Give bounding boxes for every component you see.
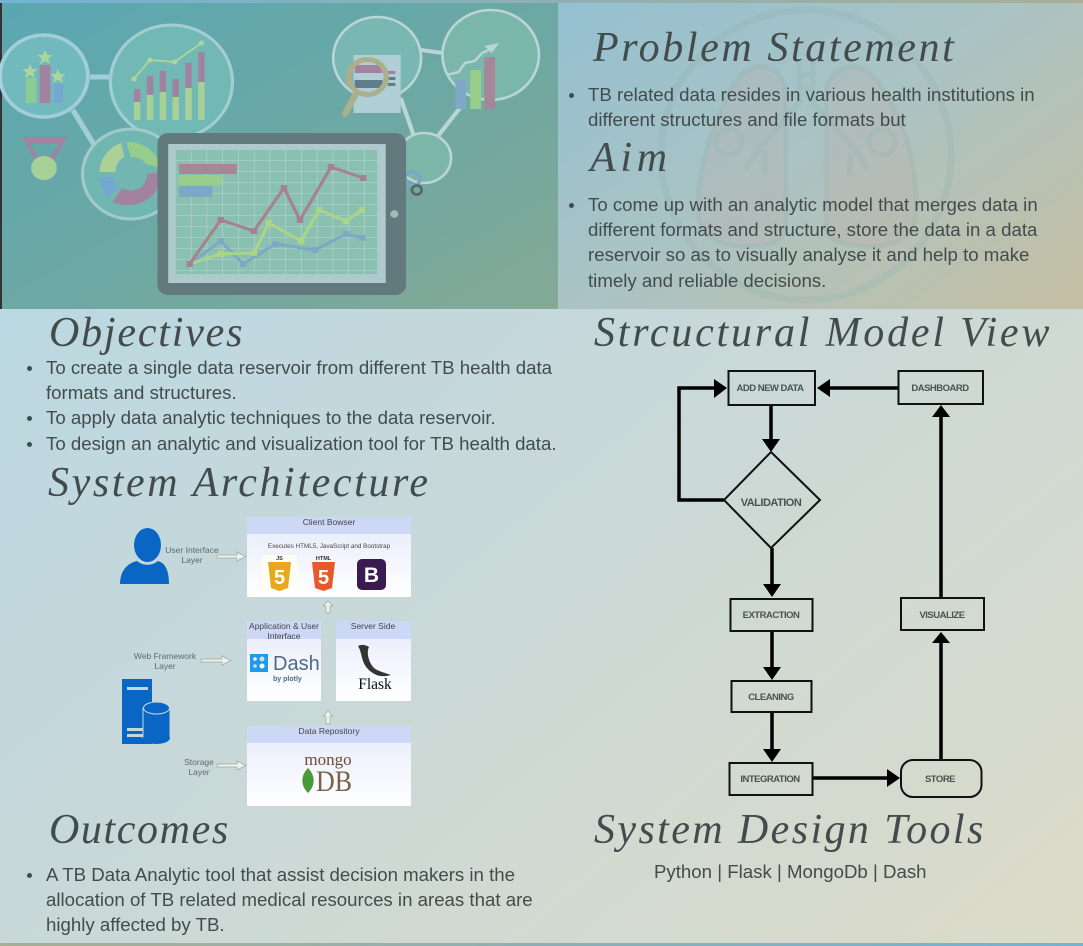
layer: client browser: Client Bowser [303, 517, 355, 527]
text: aim: different formats and structure, store the data in a data [588, 219, 1037, 240]
text: objectives list: To design an analytic and visualization tool for TB health data. [46, 433, 557, 454]
icon: dash logo [250, 653, 320, 683]
circle: magnifier report [333, 17, 421, 114]
text: aim: reservoir so as to visually analyse it and help to make [588, 244, 1029, 265]
icon: html5 [312, 556, 335, 591]
icon: dash logo: by plotly [273, 676, 302, 683]
label: web framework layer: Layer [154, 661, 176, 671]
icon: dash logo: Dash [273, 653, 320, 675]
label: user interface layer: Layer [181, 555, 203, 565]
step: store: STORE [925, 774, 955, 785]
step: validation: VALIDATION [741, 497, 802, 509]
step: dashboard: DASHBOARD [911, 383, 969, 394]
step: validation [724, 452, 820, 548]
tablet with line chart [157, 133, 406, 295]
label: storage layer: Layer [188, 767, 210, 777]
icon: mongodb logo [302, 750, 352, 798]
text: objectives list: To create a single data reservoir from different TB health data [46, 356, 552, 378]
text: aim: To come up with an analytic model that merges data in [588, 194, 1038, 214]
text: objectives list: formats and structures. [46, 382, 237, 403]
icon: bootstrap: B [364, 564, 379, 587]
heading: system architecture: System Architecture [48, 460, 431, 506]
heading: aim: Aim [590, 135, 672, 181]
top colour band [0, 0, 1083, 3]
text: outcomes [27, 864, 533, 935]
step: dashboard [898, 371, 983, 404]
label: user interface layer: User Interface [165, 545, 219, 555]
step: integration: INTEGRATION [740, 774, 800, 785]
heading: system design tools: System Design Tools [594, 807, 986, 853]
heading: outcomes: Outcomes [49, 807, 230, 853]
step: store [901, 760, 982, 797]
text: outcomes: allocation of TB related medical resources in areas that are [46, 889, 533, 910]
icon: bootstrap [357, 559, 386, 590]
layer: application interface: Application & User [249, 621, 319, 631]
text: outcomes: A TB Data Analytic tool that assist decision makers in the [46, 864, 515, 884]
step: integration [730, 763, 812, 795]
layer: client browser [247, 517, 411, 597]
text: aim: timely and reliable decisions. [588, 270, 826, 291]
text: objectives list: To apply data analytic techniques to the data reservoir. [46, 407, 496, 428]
flow arrows [679, 379, 950, 787]
step: extraction [730, 599, 812, 631]
label: web framework layer [134, 651, 197, 671]
layer: server side [336, 621, 411, 701]
text: objectives list [27, 356, 557, 454]
connectors [73, 77, 111, 145]
text: design tools: Python | Flask | MongoDb | Dash [654, 860, 927, 882]
icon: javascript: 5 [274, 567, 285, 589]
text: problem statement: different structures and file formats but [588, 109, 906, 130]
circle: donut chart [82, 129, 179, 219]
icon: mongodb logo: DB [316, 765, 352, 798]
text: problem statement: TB related data resides in various health institutions in [588, 84, 1035, 104]
layer: data repository: Data Repository [299, 726, 360, 736]
layer: application interface [247, 621, 321, 701]
circle: bar and line chart [110, 25, 232, 139]
icon: html5: 5 [318, 567, 329, 589]
circle: settings [397, 133, 451, 194]
step: cleaning [732, 681, 812, 712]
icon: user [120, 528, 169, 584]
panel: problem background [558, 3, 1083, 309]
step: visualize: VISUALIZE [919, 610, 965, 621]
icon: flask logo: Flask [358, 676, 392, 693]
circle: growth chart [442, 10, 539, 109]
icon: mongodb logo: mongo [304, 750, 352, 769]
layer: data repository [247, 726, 411, 806]
heading: problem statement: Problem Statement [593, 25, 956, 71]
label: storage layer: Storage [184, 757, 214, 767]
arrows: architecture links [201, 552, 333, 770]
label: user interface layer [165, 545, 219, 565]
heading: objectives: Objectives [49, 310, 244, 356]
illustration: data analytics tablet and charts [0, 3, 558, 309]
label: web framework layer: Web Framework [134, 651, 197, 661]
icon: html5: HTML [316, 556, 332, 562]
icon: server and database [122, 679, 170, 744]
step: add new data [728, 371, 815, 405]
layer: client browser: Executes HTML5, JavaScript and Bootstrap [268, 543, 391, 550]
step: visualize [901, 598, 984, 630]
layer: server side: Server Side [351, 621, 395, 631]
heading: structural model view: Strcuctural Model View [594, 310, 1052, 356]
text: problem statement [569, 84, 1035, 130]
bottom colour band [0, 943, 1083, 946]
text: outcomes: highly affected by TB. [46, 914, 225, 935]
step: cleaning: CLEANING [748, 692, 794, 703]
icon: javascript [262, 555, 297, 591]
icon: medal [21, 137, 67, 180]
step: extraction: EXTRACTION [743, 610, 800, 621]
circle: award chart [0, 35, 88, 117]
step: add new data: ADD NEW DATA [736, 383, 804, 394]
icon: javascript: JS [276, 556, 283, 562]
text: aim [569, 194, 1038, 291]
label: storage layer [184, 757, 214, 777]
layer: application interface: Interface [267, 631, 301, 641]
